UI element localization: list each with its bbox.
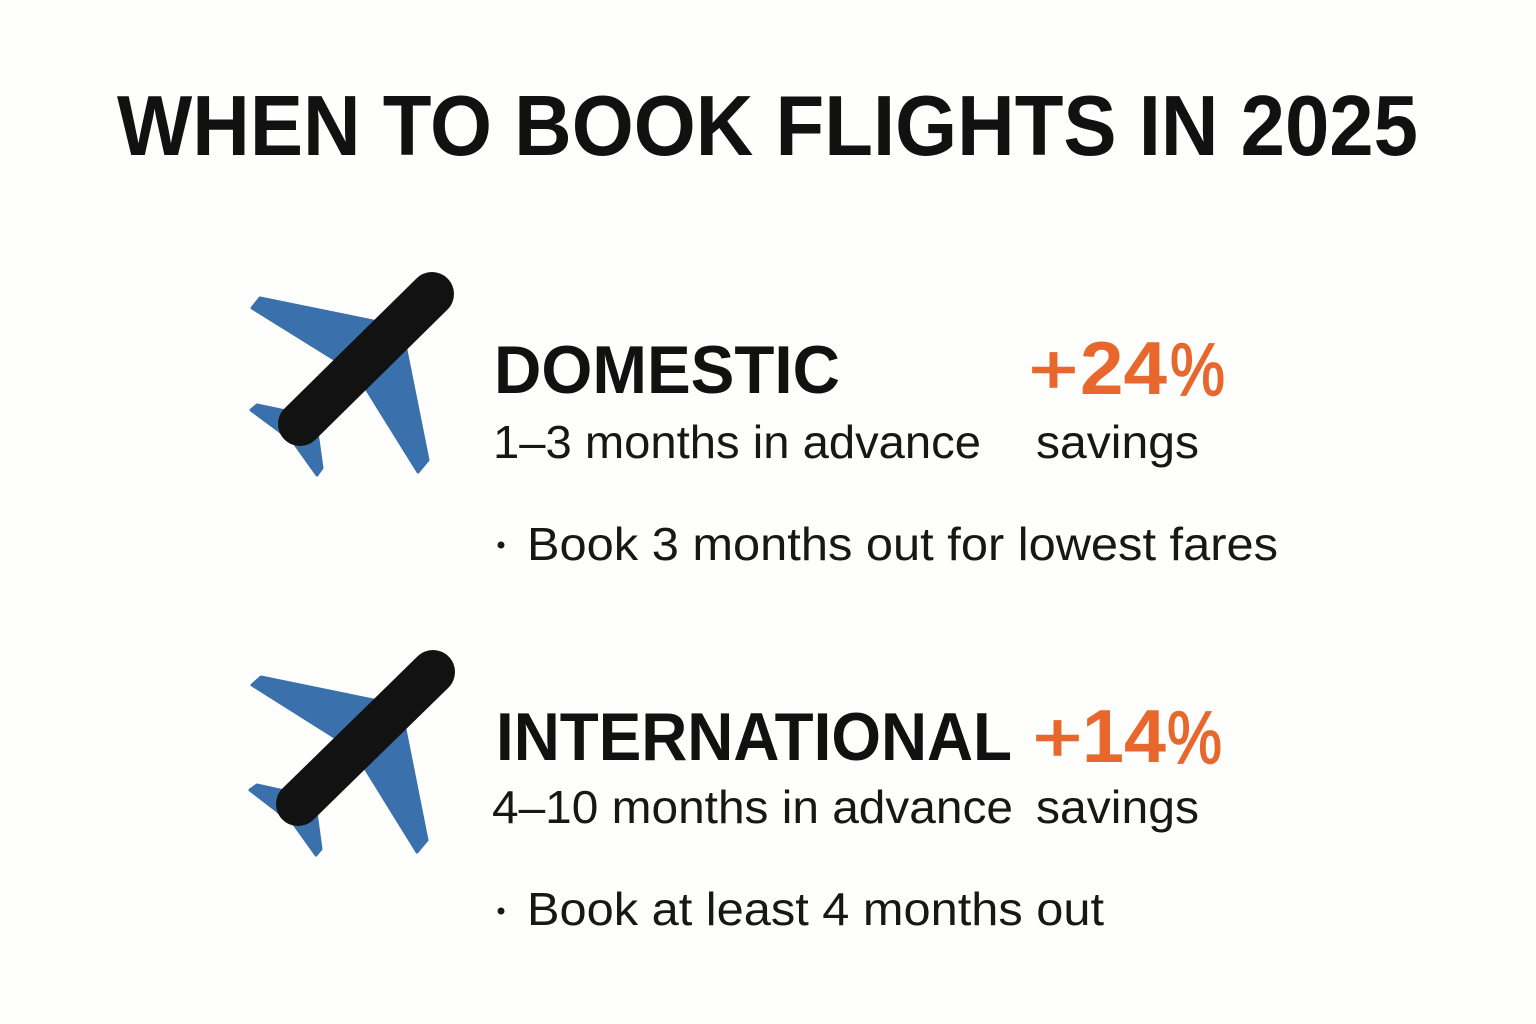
stat: +14% xyxy=(1033,694,1222,779)
stat: +14%: 14 xyxy=(1082,694,1166,778)
title: WHEN TO BOOK FLIGHTS IN 2025 xyxy=(117,79,1418,174)
icon: international airplane xyxy=(250,672,433,855)
icon: domestic airplane xyxy=(251,294,432,475)
bullet: international tip: Book at least 4 months out xyxy=(527,883,1104,935)
text: international booking window: 4–10 months in advance xyxy=(492,781,1013,833)
panel: domestic xyxy=(251,294,1278,570)
bullet: domestic tip: Book 3 months out for lowest fares xyxy=(527,518,1278,570)
text: domestic booking window: 1–3 months in advance xyxy=(493,416,981,468)
heading: domestic: DOMESTIC xyxy=(494,332,840,408)
stat: +24%: + xyxy=(1029,330,1078,408)
stat: +14%: % xyxy=(1167,696,1222,779)
stat: +24%: % xyxy=(1170,328,1225,411)
text: international savings label: savings xyxy=(1036,781,1199,833)
heading: international: INTERNATIONAL xyxy=(496,699,1012,775)
stat: +24%: 24 xyxy=(1080,326,1167,410)
stat: +14%: + xyxy=(1033,698,1082,776)
stat: +24% xyxy=(1029,326,1225,411)
text: domestic savings label: savings xyxy=(1036,416,1199,468)
panel: international xyxy=(250,672,1222,935)
